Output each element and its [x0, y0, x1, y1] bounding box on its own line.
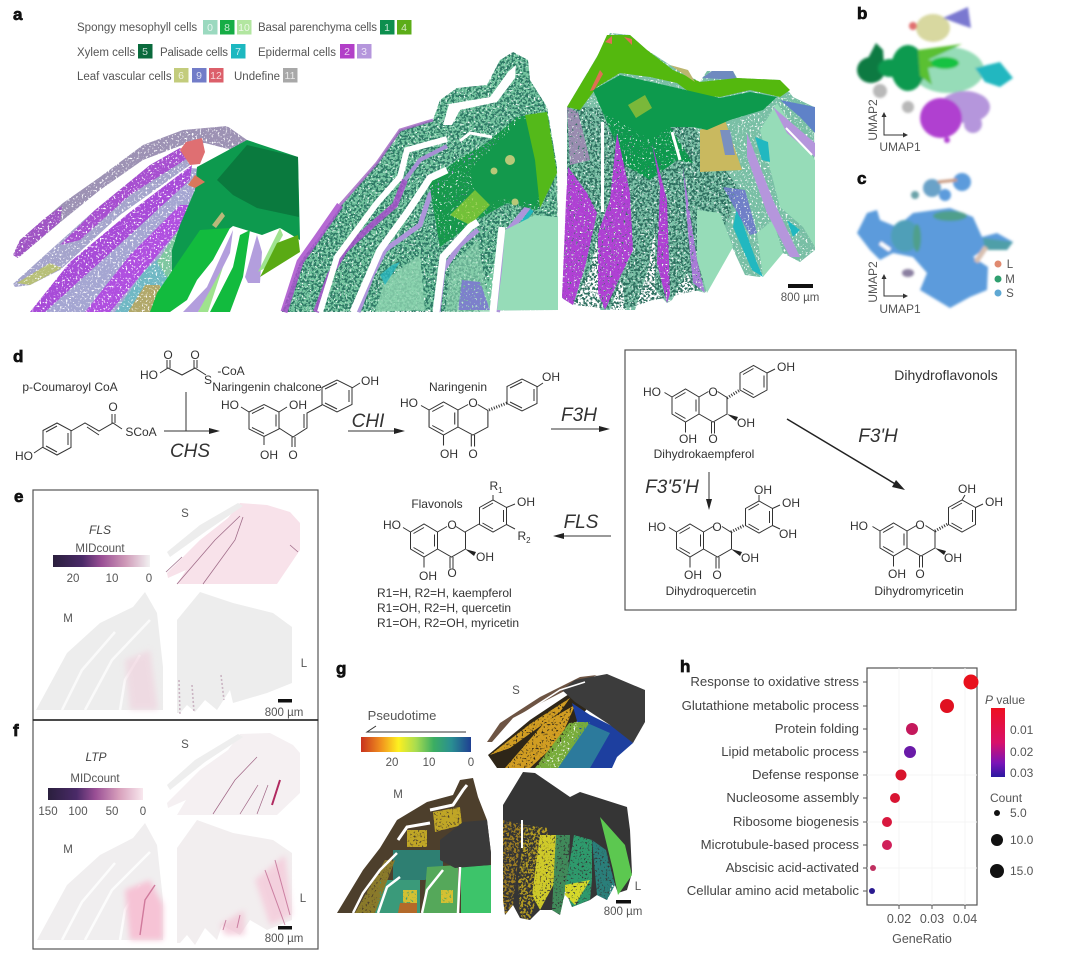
naringenin chalcone: OH — [361, 374, 379, 388]
dihydroquercetin: OH — [684, 568, 702, 582]
term labels: Nucleosome assembly — [726, 790, 859, 805]
label M: M — [63, 844, 73, 856]
dihydroquercetin: O — [712, 568, 722, 582]
legend: cell types: Epidermal cells — [258, 47, 336, 59]
malonyl CoA: O — [190, 348, 200, 362]
legend: leaf stage: M — [1005, 274, 1015, 286]
panel g: pseudotime — [336, 659, 645, 920]
panel h: GO enrichment dot plot — [680, 657, 1034, 946]
leaf M — [337, 778, 491, 913]
panel d: flavonoid biosynthesis pathway — [13, 347, 1016, 630]
dihydromyricetin: OH — [958, 482, 976, 496]
axis arrows and labels — [866, 261, 921, 316]
dihydroquercetin: OH — [779, 527, 797, 541]
arrow: F3H: F3H — [561, 405, 597, 426]
dihydromyricetin: OH — [944, 551, 962, 565]
dihydromyricetin: Dihydromyricetin — [874, 584, 964, 598]
legend: leaf stage: L — [1007, 259, 1014, 271]
legend: cell types: Spongy mesophyll cells — [77, 22, 197, 34]
panel letter b: b — [857, 4, 867, 23]
flavonols: HO — [383, 518, 401, 532]
panel e: FLS expression — [14, 487, 318, 720]
leaf L — [503, 772, 632, 920]
naringenin chalcone: OH — [289, 398, 307, 412]
legend: cell types: 11 — [285, 70, 296, 82]
arrow: CHI: CHI — [352, 411, 385, 432]
naringenin chalcone: Naringenin chalcone — [212, 380, 322, 394]
dihydroquercetin — [648, 483, 800, 598]
legend: cell types: 0 — [207, 22, 213, 34]
term labels — [682, 674, 859, 898]
term labels: Ribosome biogenesis — [733, 814, 859, 829]
arrow: CHS — [164, 392, 220, 462]
malonyl CoA: HO — [140, 368, 158, 382]
flavonols: Flavonols — [411, 497, 463, 511]
gene label: LTP — [85, 750, 107, 764]
naringenin chalcone: HO — [221, 398, 239, 412]
term labels: Protein folding — [775, 721, 859, 736]
leaf M — [36, 592, 163, 710]
colour bar: MIDcount: MIDcount — [75, 543, 125, 555]
scale bar — [604, 900, 642, 918]
panel letter g: g — [336, 659, 346, 678]
label S: S — [181, 508, 189, 520]
dot plot: 0.02 — [887, 912, 911, 926]
label M: M — [63, 613, 73, 625]
arrow: F3'H: F3'H — [858, 426, 898, 447]
term labels: Cellular amino acid metabolic — [687, 883, 859, 898]
legend: cell types: 6 — [178, 70, 184, 82]
dihydroquercetin: Dihydroquercetin — [666, 584, 756, 598]
panel c: UMAP by leaf stage — [857, 169, 1015, 316]
arrow: F3'5'H: F3'5'H — [645, 477, 699, 498]
dihydroquercetin: O — [712, 520, 722, 534]
naringenin chalcone — [212, 374, 379, 462]
UMAP density — [857, 173, 1013, 308]
panel letter c: c — [857, 169, 866, 188]
flavonols: R — [517, 529, 526, 543]
dihydroquercetin: OH — [782, 496, 800, 510]
scale bar: 800 µm — [604, 906, 642, 918]
scale bar: 800 µm — [265, 933, 303, 945]
flavonols: OH — [517, 495, 535, 509]
legend: cell types: Xylem cells — [77, 47, 135, 59]
panel letter h: h — [680, 657, 690, 676]
dihydroquercetin: HO — [648, 520, 666, 534]
p-Coumaroyl CoA: p-Coumaroyl CoA — [22, 380, 118, 394]
colour bar: MIDcount: 0 — [146, 573, 152, 585]
axis arrows and labels: UMAP1 — [879, 302, 921, 316]
legend: P value — [985, 693, 1034, 780]
p-Coumaroyl CoA — [15, 380, 157, 463]
colour bar: Pseudotime — [361, 708, 474, 769]
dihydrokaempferol: Dihydrokaempferol — [654, 447, 754, 461]
flavonols: 2 — [526, 536, 531, 545]
legend: cell types: 2 — [344, 46, 350, 58]
flavonols: 1 — [498, 486, 503, 495]
leaf L — [177, 820, 292, 945]
dihydromyricetin: O — [915, 518, 925, 532]
term labels: Defense response — [752, 767, 859, 782]
arrow: CHS: CHS — [170, 441, 210, 462]
legend: P value: 0.01 — [1010, 723, 1034, 737]
scale bar: 800 µm — [781, 292, 819, 304]
arrow: FLS — [553, 512, 611, 539]
legend: cell types: 9 — [196, 70, 202, 82]
malonyl CoA: S — [204, 373, 212, 387]
scale bar: 800 µm — [265, 707, 303, 719]
leaf M — [37, 823, 163, 940]
term labels: Abscisic acid-activated — [726, 860, 859, 875]
flavonols: OH — [476, 550, 494, 564]
arrow: CHI — [348, 411, 405, 434]
naringenin: HO — [400, 396, 418, 410]
p-Coumaroyl CoA: O — [108, 400, 118, 414]
arrow: FLS: FLS — [564, 512, 599, 533]
label M: M — [393, 789, 403, 801]
legend: cell types: 5 — [142, 46, 148, 58]
colour bar: MIDcount: 20 — [67, 573, 79, 585]
dihydrokaempferol: HO — [643, 385, 661, 399]
colour bar: MIDcount: 50 — [106, 806, 118, 818]
flavonols: O — [447, 566, 457, 580]
dihydromyricetin — [850, 482, 1003, 598]
naringenin: Naringenin — [429, 380, 487, 394]
dihydrokaempferol: O — [708, 432, 718, 446]
panel letter e: e — [14, 487, 23, 506]
label L: L — [301, 658, 308, 670]
label L: L — [300, 893, 307, 905]
dihydroquercetin: OH — [741, 551, 759, 565]
term labels: Glutathione metabolic process — [682, 698, 859, 713]
legend: Count — [990, 791, 1034, 878]
leaf S — [487, 674, 645, 768]
panel f: LTP expression — [13, 720, 318, 949]
arrow: F3'5'H — [645, 472, 712, 510]
box: dihydroflavonols: Dihydroflavonols — [894, 367, 998, 383]
colour bar: Pseudotime: 10 — [423, 757, 435, 769]
axis arrows and labels: UMAP2 — [866, 99, 880, 141]
colour bar: MIDcount: 100 — [68, 806, 88, 818]
legend: leaf stage — [994, 259, 1015, 300]
malonyl CoA: -CoA — [217, 364, 245, 378]
dot plot: GeneRatio — [892, 932, 952, 946]
leaf L — [177, 592, 292, 715]
legend: cell types: 1 — [384, 22, 390, 34]
naringenin: OH — [440, 447, 458, 461]
colour bar: MIDcount: 0 — [140, 806, 146, 818]
dihydrokaempferol — [643, 360, 795, 461]
naringenin chalcone: O — [288, 448, 298, 462]
dot plot: 0.03 — [920, 912, 944, 926]
flavonols: R1=H, R2=H, kaempferol — [377, 586, 512, 600]
label S: S — [512, 685, 520, 697]
dihydromyricetin: O — [915, 567, 925, 581]
leaf S — [167, 733, 300, 815]
legend: leaf stage: S — [1006, 288, 1014, 300]
leaf section M — [282, 52, 558, 312]
legend: Count: Count — [990, 791, 1023, 805]
flavonols: OH — [419, 569, 437, 583]
panel b: UMAP by cell type — [857, 4, 1013, 154]
naringenin chalcone: OH — [260, 448, 278, 462]
legend: cell types: Leaf vascular cells — [77, 71, 172, 83]
leaf S — [166, 503, 300, 584]
scale bar — [265, 699, 303, 719]
dihydromyricetin: OH — [888, 567, 906, 581]
legend: cell types: Basal parenchyma cells — [258, 22, 377, 34]
gene label: FLS — [89, 523, 111, 537]
malonyl CoA: O — [163, 348, 173, 362]
colour bar: Pseudotime: 20 — [386, 757, 398, 769]
dots — [869, 674, 978, 894]
legend: cell types: Palisade cells — [160, 47, 228, 59]
flavonols — [377, 479, 535, 630]
dihydrokaempferol: OH — [737, 416, 755, 430]
colour bar: MIDcount — [53, 543, 152, 585]
legend: P value: P value — [985, 693, 1025, 707]
panel letter f: f — [13, 721, 19, 740]
dihydrokaempferol: O — [708, 385, 718, 399]
flavonols: R1=OH, R2=H, quercetin — [377, 601, 511, 615]
dihydromyricetin: HO — [850, 519, 868, 533]
flavonols: R1=OH, R2=OH, myricetin — [377, 616, 519, 630]
axis arrows and labels: UMAP1 — [879, 140, 921, 154]
term labels: Lipid metabolic process — [721, 744, 859, 759]
dot plot — [682, 668, 978, 946]
dihydroquercetin: OH — [754, 483, 772, 497]
dihydrokaempferol: OH — [679, 432, 697, 446]
box: dihydroflavonols — [625, 350, 1016, 610]
dot plot: 0.04 — [953, 912, 977, 926]
scale bar — [781, 284, 819, 304]
dihydrokaempferol: OH — [777, 360, 795, 374]
panel letter a: a — [13, 5, 23, 24]
flavonols: O — [447, 518, 457, 532]
naringenin — [400, 370, 560, 461]
panel letter d: d — [13, 347, 23, 366]
naringenin: OH — [542, 370, 560, 384]
term labels: Microtubule-based process — [701, 837, 859, 852]
malonyl CoA — [140, 348, 245, 387]
panel a: spatial cell-type maps — [13, 5, 819, 312]
legend: cell types — [77, 20, 412, 83]
scale bar — [265, 926, 303, 945]
legend: Count: 10.0 — [1010, 833, 1034, 847]
legend: cell types: 8 — [224, 22, 230, 34]
legend: cell types: 4 — [401, 22, 407, 34]
legend: cell types: 10 — [238, 22, 250, 34]
label L: L — [635, 881, 642, 893]
colour bar: MIDcount: 10 — [106, 573, 118, 585]
p-Coumaroyl CoA: SCoA — [125, 425, 157, 439]
legend: cell types: 12 — [210, 70, 222, 82]
legend: P value: 0.02 — [1010, 745, 1034, 759]
arrow: F3'H — [787, 419, 905, 490]
axis arrows and labels — [866, 99, 921, 154]
leaf section S — [13, 126, 300, 312]
colour bar: MIDcount: 150 — [38, 806, 58, 818]
dihydromyricetin: OH — [985, 495, 1003, 509]
legend: cell types: Undefine — [234, 71, 280, 83]
term labels: Response to oxidative stress — [690, 674, 859, 689]
label S: S — [181, 739, 189, 751]
colour bar: MIDcount: MIDcount — [70, 773, 120, 785]
legend: Count: 15.0 — [1010, 864, 1034, 878]
leaf section L — [562, 33, 815, 310]
p-Coumaroyl CoA: HO — [15, 449, 33, 463]
legend: P value: 0.03 — [1010, 766, 1034, 780]
naringenin: O — [468, 447, 478, 461]
axis arrows and labels: UMAP2 — [866, 261, 880, 303]
legend: Count: 5.0 — [1010, 806, 1027, 820]
colour bar: Pseudotime: Pseudotime — [368, 708, 436, 723]
legend: cell types: 7 — [235, 46, 241, 58]
naringenin: O — [468, 396, 478, 410]
arrow: F3H — [551, 405, 610, 432]
legend: cell types: 3 — [361, 46, 367, 58]
colour bar: Pseudotime: 0 — [468, 757, 474, 769]
colour bar: MIDcount — [38, 773, 146, 818]
UMAP clusters — [857, 7, 1013, 143]
flavonols: R — [489, 479, 498, 493]
